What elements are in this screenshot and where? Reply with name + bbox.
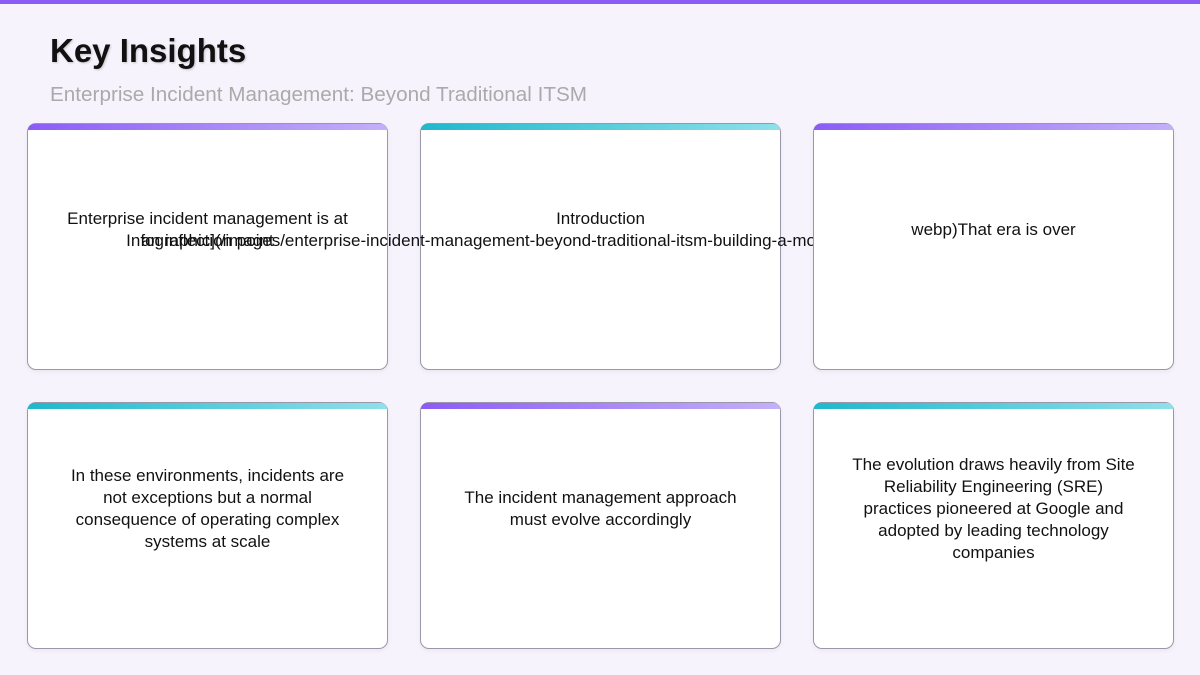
card 1: Enterprise incident management is at an inflection point <box>67 208 348 250</box>
card 3 <box>813 123 1174 370</box>
card 2: Infographic](/images/enterprise-incident-management-beyond-traditional-itsm-building-a-modern-incident-response-framework <box>126 230 1075 250</box>
card 6: The evolution draws heavily from Site Reliability Engineering (SRE) practices pioneered at Google and adopted by leading technology companies <box>852 454 1135 562</box>
card 4: In these environments, incidents are not exceptions but a normal consequence of operating complex systems at scale <box>71 466 344 550</box>
card 1 <box>27 123 388 370</box>
subtitle: Enterprise Incident Management: Beyond Traditional ITSM <box>50 83 587 106</box>
card 4 <box>27 402 388 649</box>
title: Key Insights <box>50 32 246 69</box>
card 5: The incident management approach must evolve accordingly <box>464 488 737 528</box>
card 5 <box>420 402 781 649</box>
card 2 <box>420 123 781 370</box>
card 6 <box>813 402 1174 649</box>
card 2: Introduction <box>556 208 645 228</box>
card 3: webp)That era is over <box>911 220 1076 238</box>
